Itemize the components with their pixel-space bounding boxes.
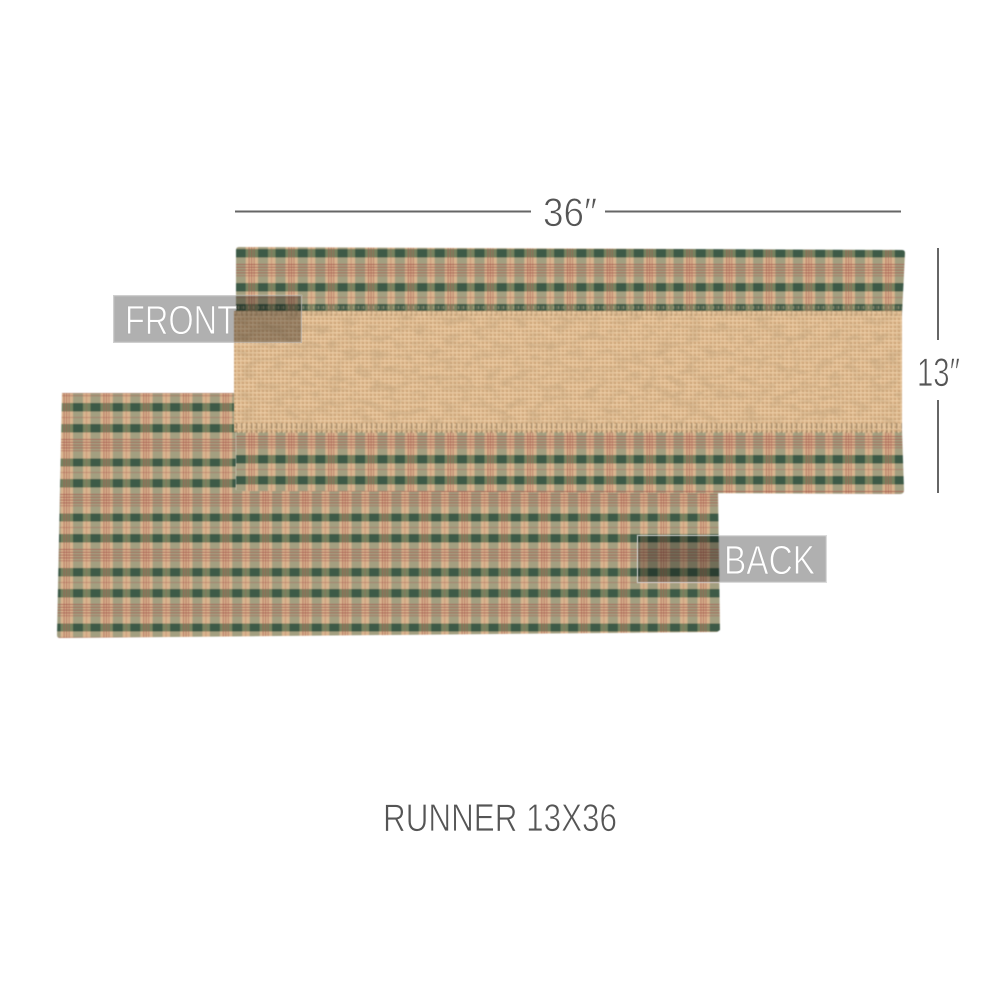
label: back: BACK	[724, 537, 815, 583]
front top plaid band	[236, 247, 905, 314]
height dimension: 13 inches: 13″	[917, 351, 960, 395]
burlap top fringe	[236, 306, 902, 316]
burlap mottling	[234, 311, 902, 432]
burlap centre band	[234, 311, 902, 432]
front bottom plaid band	[236, 430, 904, 494]
label: front: FRONT	[125, 297, 237, 343]
runner front panel	[234, 247, 905, 494]
burlap bottom fringe	[234, 423, 902, 433]
runner back panel	[57, 393, 720, 638]
product caption: RUNNER 13X36	[383, 797, 617, 840]
width dimension: 36 inches: 36″	[543, 191, 597, 235]
label: back	[637, 535, 827, 583]
